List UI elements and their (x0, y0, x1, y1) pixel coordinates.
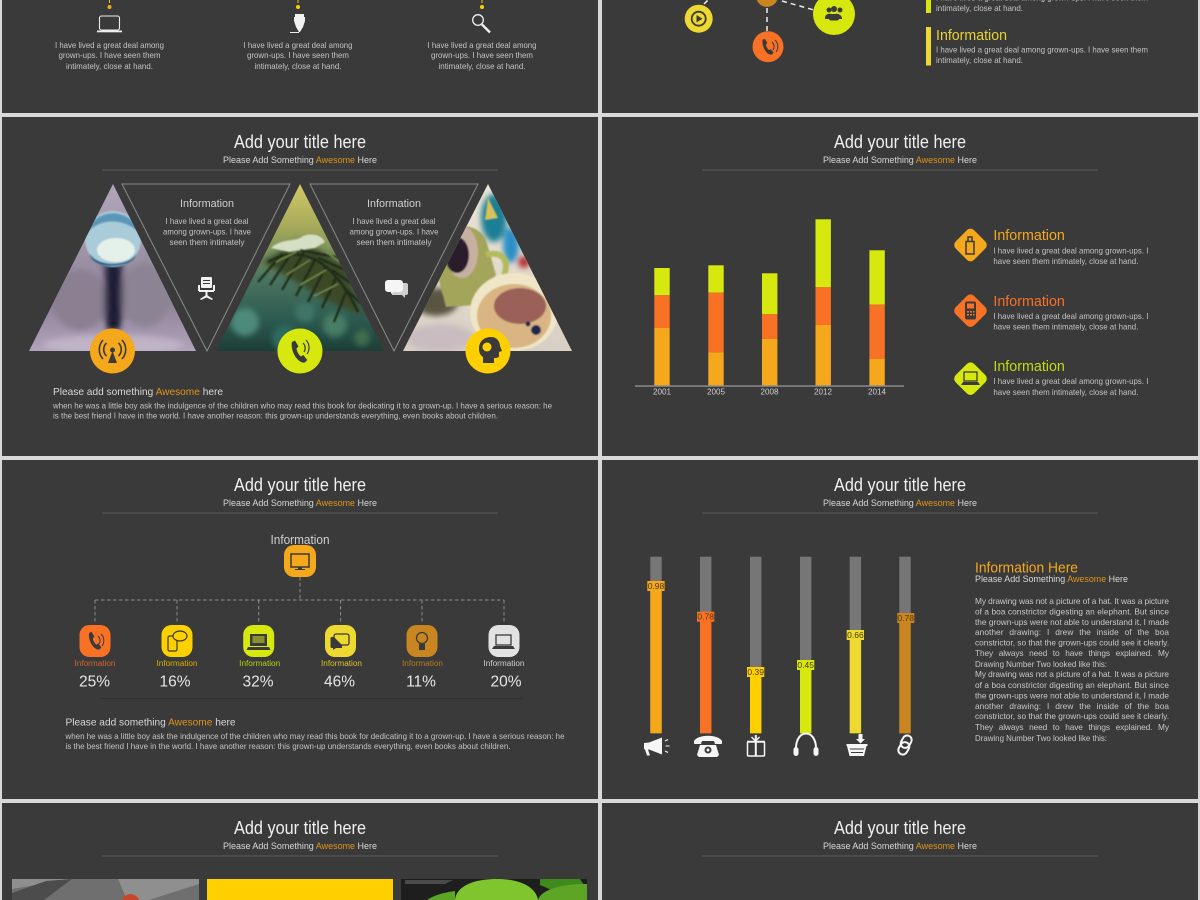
column: pen nib: intimately, close at hand. (254, 61, 342, 71)
node: bulb 11%: Information (402, 659, 443, 668)
outline triangle: chat info: seen them intimately (356, 237, 432, 247)
card: yellow (207, 879, 393, 900)
network connectors (704, 0, 814, 32)
heading (702, 818, 1098, 856)
column: laptop (55, 0, 164, 71)
icon circle: phone (278, 328, 322, 374)
icon: chat bubbles (385, 280, 408, 298)
node: phone 25%: Information (74, 659, 116, 668)
column: pen nib (244, 0, 353, 71)
legend item: lime: Information (993, 359, 1065, 375)
bar chart (635, 219, 904, 396)
text block: information here: the grown-ups were not able to understand it, I made (975, 617, 1169, 627)
text block (65, 716, 565, 751)
column: magnifier (428, 0, 537, 71)
legend item: orange: have seen them intimately, close at hand. (993, 322, 1138, 332)
progress bar: 0.78 link (897, 557, 914, 756)
legend item: orange (952, 292, 1148, 332)
legend item: amber: Information (993, 228, 1065, 244)
column: magnifier: I have lived a great deal among (428, 40, 537, 50)
outline triangle: chat info: among grown-ups. I have (350, 226, 439, 236)
text block: information here: Please Add Something Awesome Here (975, 574, 1128, 585)
photo triangle: glass sphere (25, 180, 200, 355)
node: mobile chat 16% (156, 625, 198, 690)
info item: yellow: intimately, close at hand. (936, 55, 1023, 65)
node: phone 25%: 25% (79, 674, 110, 690)
text block: information here: They always need to have things explained. My (975, 722, 1170, 732)
text block: information here (975, 560, 1170, 743)
text block: information here: Drawing Number Two looked like this: (975, 659, 1107, 669)
outline triangle: chair info: among grown-ups. I have (163, 226, 251, 236)
heading: Add your title here (234, 132, 366, 152)
progress bar: 0.45 headphones (794, 557, 818, 756)
photo: green limes (401, 879, 587, 900)
node: laptop 20%: Information (484, 659, 524, 668)
panel: org tree with percentages (2, 460, 598, 799)
bar chart: 2008 (760, 388, 779, 396)
node: laptop 32%: Information (239, 659, 280, 668)
icon circle: antenna (90, 328, 135, 374)
heading (102, 132, 498, 170)
column: magnifier: grown-ups. I have seen them (431, 50, 533, 60)
text block: information here: They always need to have things explained. My (975, 648, 1170, 658)
outline triangle: chair info: seen them intimately (170, 237, 245, 247)
bar chart: 2005 (707, 388, 726, 396)
legend item: orange: Information (993, 294, 1065, 310)
text block: information here: Information Here (975, 560, 1078, 576)
column: magnifier: intimately, close at hand. (438, 61, 526, 71)
tree connectors (95, 577, 504, 624)
bar chart: 2012 (814, 388, 833, 396)
column: pen nib: I have lived a great deal among (244, 40, 353, 50)
panel: network diagram (602, 0, 1198, 113)
node: chat 46%: Information (321, 659, 362, 668)
root node: Information (270, 533, 330, 547)
heading: Add your title here (234, 818, 366, 838)
heading: Add your title here (834, 475, 966, 495)
legend item: amber: have seen them intimately, close at hand. (993, 256, 1138, 266)
panel: three icons with text (2, 0, 598, 113)
progress bar: 0.66 basket: 0.66 (847, 630, 864, 640)
info item: yellow (926, 27, 1148, 66)
node: laptop 32%: 32% (242, 674, 274, 690)
legend item: lime (952, 359, 1148, 397)
heading: Add your title here (834, 818, 966, 838)
root node (270, 533, 330, 577)
heading: Please Add Something Awesome Here (223, 498, 377, 508)
node: laptop 20% (484, 625, 524, 690)
panel: triangles with photos (2, 117, 598, 456)
text block: information here: the grown-ups were not able to understand it, I made (975, 690, 1169, 700)
progress bar: 0.39 gift (747, 557, 765, 756)
outline triangle: chair info (122, 184, 290, 351)
node: people (813, 0, 855, 35)
text block: Please add something Awesome here (53, 386, 223, 398)
node: play (685, 5, 713, 33)
node: mobile chat 16%: Information (156, 659, 198, 668)
progress bar: 0.66 basket (846, 557, 868, 756)
heading: Add your title here (234, 475, 366, 495)
node: phone 25% (74, 625, 116, 690)
progress bar: 0.98 megaphone: 0.98 (648, 581, 665, 591)
info item: lime (926, 0, 1148, 13)
legend item: lime: have seen them intimately, close at hand. (993, 387, 1138, 397)
text block: when he was a little boy ask the indulgence of the children who may read this book for dedicating it to a grown-up. I have a serious reason: he (65, 731, 565, 741)
column: laptop: intimately, close at hand. (66, 61, 153, 71)
text block: information here: of a boa constrictor digesting an elephant. But since (975, 606, 1169, 616)
text block: information here: of a boa constrictor digesting an elephant. But since (975, 680, 1169, 690)
outline triangle: chat info: I have lived a great deal (352, 216, 436, 226)
text block (52, 386, 552, 420)
text block: Please add something Awesome here (66, 716, 236, 728)
outline triangle: chat info (310, 184, 478, 351)
panel: empty titled slide (602, 803, 1198, 900)
text block: information here: constrictor, so that the grown-ups could see it clearly. (975, 711, 1169, 721)
heading (102, 818, 498, 856)
heading (702, 475, 1098, 514)
bar chart: 2014 (868, 388, 887, 396)
outline triangle: chair info: I have lived a great deal (166, 216, 249, 226)
bar chart: 2001 (653, 388, 672, 396)
legend item: lime: I have lived a great deal among grown-ups. I (993, 376, 1148, 386)
outline triangle: chat info: Information (367, 198, 421, 210)
node: chat 46%: 46% (324, 674, 355, 690)
heading: Please Add Something Awesome Here (223, 841, 377, 851)
legend item: amber: I have lived a great deal among grown-ups. I (993, 245, 1148, 255)
node: top brown (757, 0, 777, 7)
node: bulb 11% (402, 625, 443, 690)
node: bulb 11%: 11% (406, 674, 436, 690)
outline triangle: chair info: Information (180, 198, 234, 210)
column: laptop: I have lived a great deal among (55, 40, 164, 50)
progress bar: 0.98 megaphone (644, 557, 670, 756)
text block: is the best friend I have in the world. I have another reason: this grown-up understands everything, even books about children. (66, 741, 510, 751)
text block: information here: constrictor, so that the grown-ups could see it clearly. (975, 638, 1169, 648)
panel: image cards (2, 803, 598, 900)
progress bar: 0.78 telephone (694, 557, 722, 757)
progress bar: 0.45 headphones: 0.45 (797, 660, 814, 670)
text block: information here: Drawing Number Two looked like this: (975, 733, 1107, 743)
photo: grey rock with red detail (12, 879, 199, 900)
text block: information here: My drawing was not a picture of a hat. It was a picture (975, 596, 1169, 606)
heading: Please Add Something Awesome Here (823, 155, 977, 165)
photo triangle: pine branch (212, 180, 388, 355)
heading: Please Add Something Awesome Here (823, 841, 977, 851)
legend item: amber (952, 227, 1148, 266)
icon: chair (198, 277, 215, 300)
heading (702, 132, 1098, 170)
progress bar: 0.78 telephone: 0.78 (697, 612, 714, 622)
panel: stacked bar chart (602, 117, 1198, 456)
info item: lime: intimately, close at hand. (936, 3, 1023, 13)
text block: information here: another drawing: I drew the inside of the boa (975, 627, 1169, 637)
column: pen nib: grown-ups. I have seen them (247, 50, 349, 60)
node: laptop 32% (239, 625, 280, 690)
text block: information here: another drawing: I drew the inside of the boa (975, 701, 1169, 711)
text block: is the best friend I have in the world. I have another reason: this grown-up understands everything, even books about children. (53, 410, 498, 420)
info item: yellow: I have lived a great deal among grown-ups. I have seen them (936, 44, 1148, 54)
column: laptop: grown-ups. I have seen them (58, 50, 161, 60)
node: laptop 20%: 20% (490, 674, 522, 690)
photo triangle: coffee cups (400, 180, 576, 355)
progress bar: 0.78 link: 0.78 (897, 613, 914, 623)
legend item: orange: I have lived a great deal among grown-ups. I (993, 311, 1148, 321)
heading (102, 475, 498, 514)
panel: vertical progress bars (602, 460, 1198, 799)
node: phone (752, 31, 784, 62)
node: chat 46% (321, 625, 362, 690)
text block: when he was a little boy ask the indulgence of the children who may read this book for dedicating it to a grown-up. I have a serious reason: he (52, 400, 552, 410)
progress bar: 0.39 gift: 0.39 (747, 667, 764, 677)
heading: Add your title here (834, 132, 966, 152)
info item: yellow: Information (936, 28, 1007, 44)
text block: information here: My drawing was not a picture of a hat. It was a picture (975, 669, 1169, 679)
heading: Please Add Something Awesome Here (823, 498, 977, 508)
heading: Please Add Something Awesome Here (223, 155, 377, 165)
icon circle: head idea (466, 328, 510, 374)
node: mobile chat 16%: 16% (159, 674, 191, 690)
